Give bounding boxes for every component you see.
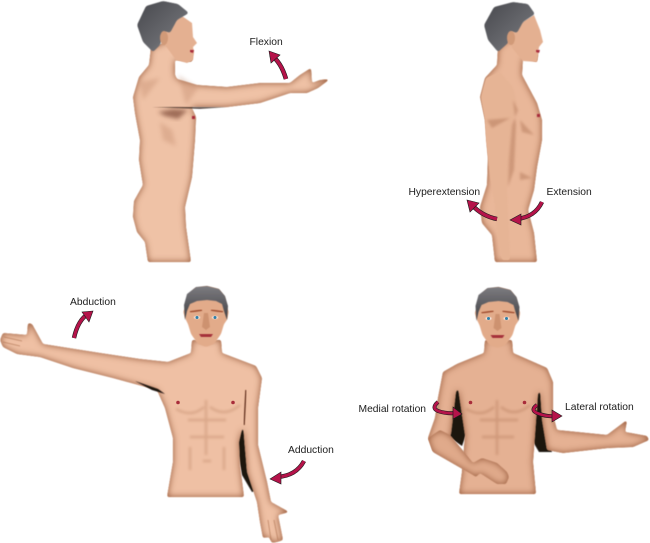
lips and nipple — [190, 50, 195, 119]
torso — [480, 35, 542, 262]
label: flexion: Flexion — [250, 37, 283, 48]
torso and raised arm — [133, 40, 330, 262]
label: abduction: Abduction — [70, 297, 116, 308]
body and arms — [0, 323, 289, 543]
forearm and hand — [428, 430, 509, 484]
shadow beside arm — [236, 415, 258, 492]
nipples — [469, 401, 472, 404]
arm — [481, 72, 517, 260]
arrow: flexion — [271, 55, 286, 79]
body with arms — [428, 340, 649, 494]
shadow under raised arm — [135, 381, 165, 394]
ear — [507, 31, 515, 45]
nipples — [176, 401, 180, 404]
face — [508, 15, 543, 62]
chest and abdominal shading — [176, 400, 240, 470]
muscle shading — [140, 75, 198, 146]
arrow: hyperextension — [472, 205, 497, 219]
figure: extension — [408, 2, 592, 262]
ear — [160, 31, 168, 45]
label: hyperextension: Hyperextension — [408, 187, 480, 198]
arrow: medial rotation — [434, 402, 456, 413]
hair — [484, 2, 535, 52]
armpit crease — [244, 390, 246, 425]
face — [160, 16, 197, 63]
hair — [137, 1, 189, 52]
arrow: lateral rotation — [534, 405, 556, 416]
shadow under arm — [158, 109, 188, 119]
label: adduction: Adduction — [288, 445, 334, 456]
arrow: adduction — [277, 461, 304, 477]
finger lines — [3, 337, 278, 540]
figure: abduction and adduction — [0, 286, 334, 543]
figure: flexion — [133, 1, 330, 262]
figure: medial and lateral rotation — [358, 287, 649, 494]
shadows beside arms — [448, 386, 552, 480]
head — [474, 287, 520, 348]
label: lateral rotation: Lateral rotation — [565, 402, 634, 413]
label: extension: Extension — [546, 187, 592, 198]
arm and chest shading — [487, 100, 534, 187]
arrow: abduction — [74, 314, 88, 338]
chest shading — [466, 400, 530, 455]
label: medial rotation: Medial rotation — [358, 404, 426, 415]
lips and nipple — [536, 50, 540, 117]
arrow: extension — [517, 202, 542, 219]
head — [183, 286, 229, 347]
